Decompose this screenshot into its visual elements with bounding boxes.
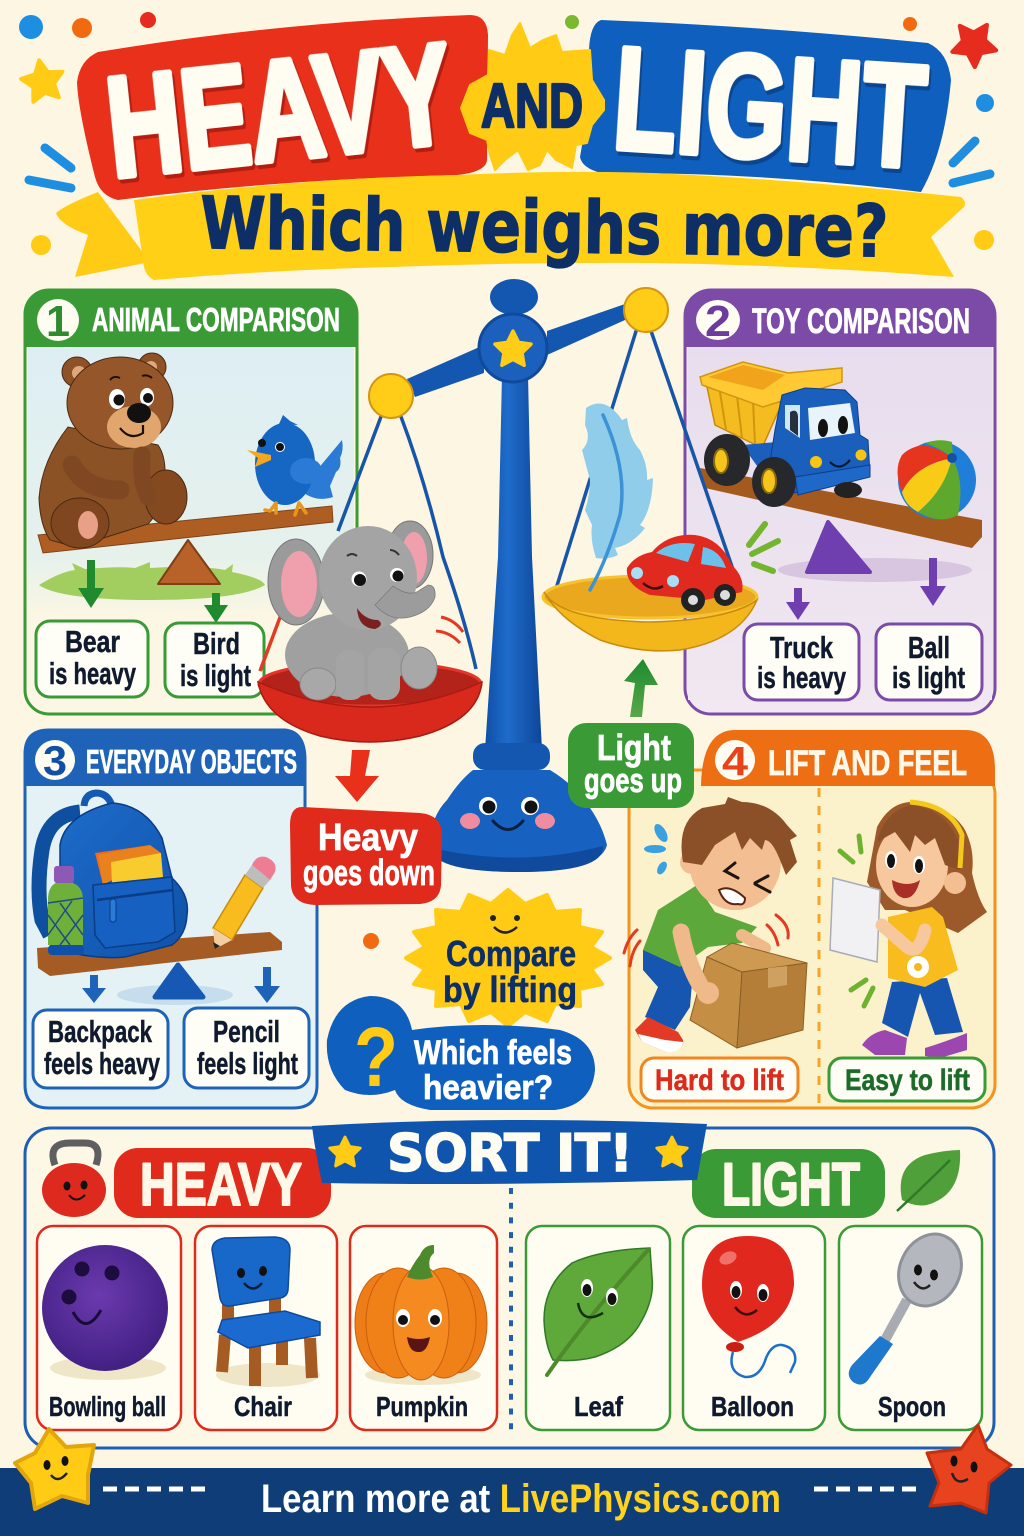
number badge 3: 3 <box>43 737 67 784</box>
illustration: boy lifting box <box>635 797 807 1053</box>
number badge 3 <box>35 737 75 784</box>
card: chair: Chair <box>234 1391 292 1422</box>
top knob <box>490 279 538 315</box>
card: balloon <box>683 1226 825 1430</box>
red pan <box>258 682 482 742</box>
icon: bird <box>247 415 343 515</box>
icon: toy car <box>627 535 743 612</box>
heading: animal comparison: ANIMAL COMPARISON <box>92 301 340 338</box>
icon: feather <box>582 404 653 590</box>
number badge 4 <box>715 738 755 784</box>
label: pencil feels light: feels light <box>197 1046 298 1081</box>
icon: spoon <box>849 1224 973 1385</box>
label: heavy heading: HEAVY <box>140 1151 302 1218</box>
label: bear is heavy <box>36 621 148 697</box>
number badge 2: 2 <box>705 297 731 346</box>
card: leaf: Leaf <box>574 1391 624 1422</box>
label: truck is heavy: is heavy <box>757 660 847 695</box>
card: chair <box>195 1226 337 1430</box>
card: spoon <box>839 1224 982 1430</box>
card: bowling ball <box>37 1226 181 1430</box>
footer text: Learn more at LivePhysics.com <box>261 1477 781 1521</box>
seesaw <box>700 468 982 572</box>
callout: light goes up: Light <box>597 727 671 768</box>
number badge 4: 4 <box>722 738 748 784</box>
arrow: heavy goes down <box>335 750 379 802</box>
subtitle ribbon <box>56 172 965 280</box>
number badge 2 <box>696 297 740 346</box>
label: ball is light: Ball <box>908 630 950 665</box>
heading: everyday objects: EVERYDAY OBJECTS <box>86 743 297 780</box>
motion marks <box>436 617 463 643</box>
heading: lift and feel: LIFT AND FEEL <box>768 744 967 783</box>
label: backpack feels heavy <box>33 1010 168 1088</box>
label: ball is light <box>876 624 982 700</box>
label: hard to lift <box>641 1058 798 1101</box>
footer band <box>0 1468 1024 1536</box>
post <box>485 375 542 750</box>
seesaw shadow <box>117 985 233 1005</box>
label: pencil feels light <box>184 1008 309 1088</box>
central balance scale <box>258 279 757 872</box>
callout: heavy goes down: Heavy <box>318 817 418 859</box>
label: bird is light: Bird <box>193 626 240 661</box>
icon: kettlebell <box>42 1143 106 1217</box>
callout: light goes up: goes up <box>584 762 682 800</box>
banner: sort it: SORT IT! <box>387 1124 633 1184</box>
seesaw <box>37 932 282 997</box>
seesaw <box>38 506 333 584</box>
icon: pumpkin <box>355 1245 487 1380</box>
label: bird is light <box>165 623 264 697</box>
icon: dump truck <box>700 362 870 507</box>
number badge 1 <box>37 297 79 346</box>
arrow: ball down <box>920 558 946 606</box>
icon: small leaf <box>897 1150 960 1211</box>
card: balloon: Balloon <box>711 1391 794 1422</box>
label: ball is light: is light <box>892 660 965 695</box>
sweat drops <box>644 822 670 876</box>
arrow: truck down <box>786 588 810 620</box>
label: truck is heavy: Truck <box>770 630 834 665</box>
panel 1: animal comparison <box>25 290 357 714</box>
label: backpack feels heavy: Backpack <box>48 1014 153 1049</box>
icon: leaf <box>544 1248 652 1375</box>
card: pumpkin <box>350 1226 497 1430</box>
card: pumpkin: Pumpkin <box>376 1391 468 1422</box>
callout: which feels heavier: Which feels <box>414 1034 572 1072</box>
banner: sort it <box>312 1120 707 1184</box>
label: hard to lift: Hard to lift <box>655 1064 784 1097</box>
card: leaf <box>526 1226 670 1430</box>
header decorations <box>19 12 997 255</box>
label: easy to lift <box>829 1058 985 1101</box>
arrow: pencil down <box>254 967 280 1003</box>
motion marks <box>749 524 778 571</box>
card: bowling ball: Bowling ball <box>49 1391 166 1422</box>
label: pencil feels light: Pencil <box>213 1014 280 1049</box>
seesaw shadow <box>778 558 972 582</box>
callout: light goes up <box>568 723 694 808</box>
icon: beach ball <box>898 440 976 519</box>
left ball joint <box>369 374 413 418</box>
effort marks <box>624 915 788 966</box>
icon: bowling ball <box>42 1245 168 1371</box>
base with face <box>428 743 607 872</box>
hub with star <box>479 314 547 382</box>
right ball joint <box>624 288 668 332</box>
label: bear is heavy: Bear <box>65 624 120 659</box>
callout: heavy goes down: goes down <box>303 852 435 893</box>
number badge 1: 1 <box>46 297 70 346</box>
panel: sort it <box>25 1120 994 1448</box>
illustration: girl with paper <box>830 802 987 1058</box>
title burst: AND: AND <box>481 72 583 141</box>
callout: which feels heavier <box>327 996 595 1110</box>
left strings <box>260 414 476 671</box>
label: truck is heavy <box>744 624 859 700</box>
orange dot <box>363 933 379 949</box>
beam <box>407 304 625 397</box>
panel 2: toy comparison <box>685 290 995 714</box>
panel 3: everyday objects <box>25 730 317 1108</box>
arrow: light goes up <box>624 659 658 717</box>
callout: which feels heavier: ? <box>354 1010 398 1104</box>
callout: compare by lifting: Compare <box>446 933 576 974</box>
arrow: backpack down <box>82 975 106 1003</box>
icon: balloon <box>702 1236 795 1377</box>
grass <box>39 562 265 600</box>
sparkle marks <box>840 836 873 1006</box>
icon: backpack <box>39 793 187 958</box>
label: light heading: LIGHT <box>722 1151 860 1218</box>
icon: red star mascot <box>927 1425 1011 1513</box>
label: backpack feels heavy: feels heavy <box>44 1046 161 1081</box>
arrow: bear down <box>78 560 104 608</box>
yellow pan back <box>543 576 757 618</box>
callout: compare by lifting: by lifting <box>443 969 577 1010</box>
right strings <box>555 328 740 592</box>
arrow: bird down <box>204 593 228 623</box>
icon: pencil <box>213 857 276 949</box>
title burst: AND <box>461 23 604 170</box>
yellow pan <box>544 592 757 651</box>
callout: which feels heavier: heavier? <box>423 1069 553 1107</box>
label: bear is heavy: is heavy <box>49 656 137 691</box>
card: spoon: Spoon <box>878 1391 946 1422</box>
callout: compare by lifting <box>406 890 610 1026</box>
panel 4: lift and feel <box>624 730 995 1108</box>
icon: chair <box>212 1237 320 1386</box>
label: easy to lift: Easy to lift <box>845 1064 970 1097</box>
icon: elephant <box>268 521 437 700</box>
icon: bear <box>39 353 187 548</box>
red pan back <box>259 662 481 706</box>
icon: yellow star mascot <box>15 1429 94 1509</box>
title: HEAVY: HEAVY <box>100 14 459 208</box>
callout: heavy goes down <box>290 807 442 905</box>
subtitle ribbon: Which weighs more? <box>200 181 889 273</box>
label: bird is light: is light <box>180 658 251 693</box>
